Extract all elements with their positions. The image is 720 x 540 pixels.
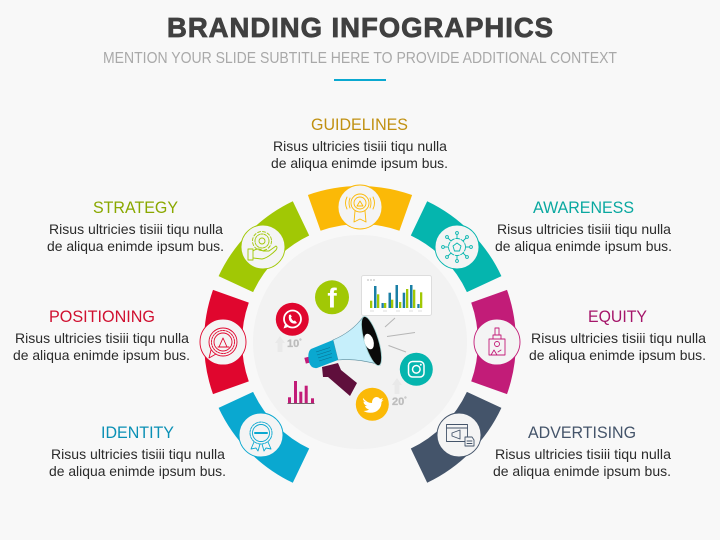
icon: facebook: [315, 280, 349, 314]
icon: award badge: [338, 185, 382, 229]
awareness heading: AWARENESS: [533, 199, 634, 217]
icon: whatsapp: [276, 303, 309, 336]
stat: 20 degrees: °: [404, 397, 407, 403]
panel: positioning: [13, 290, 249, 394]
subtitle: MENTION YOUR SLIDE SUBTITLE HERE TO PROVIDE ADDITIONAL CONTEXT: [103, 50, 617, 67]
strategy text: Risus ultricies tisiii tiqu nulla: [49, 221, 223, 237]
equity text: [529, 330, 706, 363]
guidelines arc: [308, 186, 412, 231]
strategy heading: STRATEGY: [93, 199, 178, 217]
icon: gear network: [435, 225, 479, 269]
positioning arc: [204, 290, 249, 394]
icon: facebook: f: [327, 282, 337, 314]
stat: 10 degrees: [275, 336, 302, 352]
positioning text: [13, 330, 190, 363]
awareness text: [495, 221, 672, 254]
stat: 10 degrees: 10: [287, 338, 299, 350]
guidelines heading: GUIDELINES: [311, 116, 408, 134]
panel: awareness: [411, 199, 672, 292]
identity text: [49, 446, 226, 479]
panel: equity: [471, 290, 706, 394]
icon: target seal: [200, 319, 246, 365]
equity text: Risus ultricies tisiii tiqu nulla: [531, 330, 706, 346]
strategy arc: [219, 201, 309, 292]
positioning heading: POSITIONING: [49, 308, 155, 326]
identity heading: IDENTITY: [101, 424, 174, 442]
stat: 20 degrees: [392, 378, 407, 408]
equity arc: [471, 290, 516, 394]
advertising text: [493, 446, 671, 479]
panel: advertising: [411, 392, 671, 483]
advertising heading: ADVERTISING: [528, 424, 636, 442]
icon: megaphone: [304, 315, 386, 396]
mini bar chart: [288, 381, 314, 404]
advertising text: de aliqua enimde ipsum bus.: [493, 463, 671, 479]
megaphone sound rays: [385, 318, 415, 352]
identity text: de aliqua enimde ipsum bus.: [49, 463, 226, 479]
bar chart card: [362, 276, 432, 316]
equity heading: EQUITY: [588, 308, 647, 326]
stat: 10 degrees: °: [299, 339, 302, 345]
awareness arc: [411, 201, 501, 292]
positioning text: Risus ultricies tisiii tiqu nulla: [15, 330, 189, 346]
strategy text: de aliqua enimde ipsum bus.: [47, 238, 224, 254]
icon: instagram: [400, 353, 433, 386]
title accent line: [334, 79, 386, 81]
strategy text: [47, 221, 224, 254]
equity text: de aliqua enimde ipsum bus.: [529, 347, 706, 363]
icon: id tag: [474, 319, 520, 365]
guidelines text: [271, 138, 448, 171]
advertising text: Risus ultricies tisiii tiqu nulla: [495, 446, 671, 462]
icon: browser advert: [437, 413, 481, 457]
icon: brand rosette: [239, 413, 283, 457]
advertising arc: [411, 392, 501, 483]
guidelines text: de aliqua enimde ipsum bus.: [271, 155, 448, 171]
icon: twitter: [356, 388, 389, 421]
awareness text: Risus ultricies tisiii tiqu nulla: [497, 221, 671, 237]
positioning text: de aliqua enimde ipsum bus.: [13, 347, 190, 363]
title: BRANDING INFOGRAPHICS: [167, 12, 553, 43]
panel: identity: [49, 392, 309, 483]
icon: hand holding gear: [241, 225, 285, 269]
panel: strategy: [47, 199, 309, 292]
stat: 20 degrees: 20: [392, 396, 404, 408]
identity text: Risus ultricies tisiii tiqu nulla: [51, 446, 225, 462]
panel: guidelines: [271, 116, 448, 231]
guidelines text: Risus ultricies tisiii tiqu nulla: [273, 138, 447, 154]
awareness text: de aliqua enimde ipsum bus.: [495, 238, 672, 254]
panel: central circle: [253, 235, 467, 449]
identity arc: [219, 392, 309, 483]
